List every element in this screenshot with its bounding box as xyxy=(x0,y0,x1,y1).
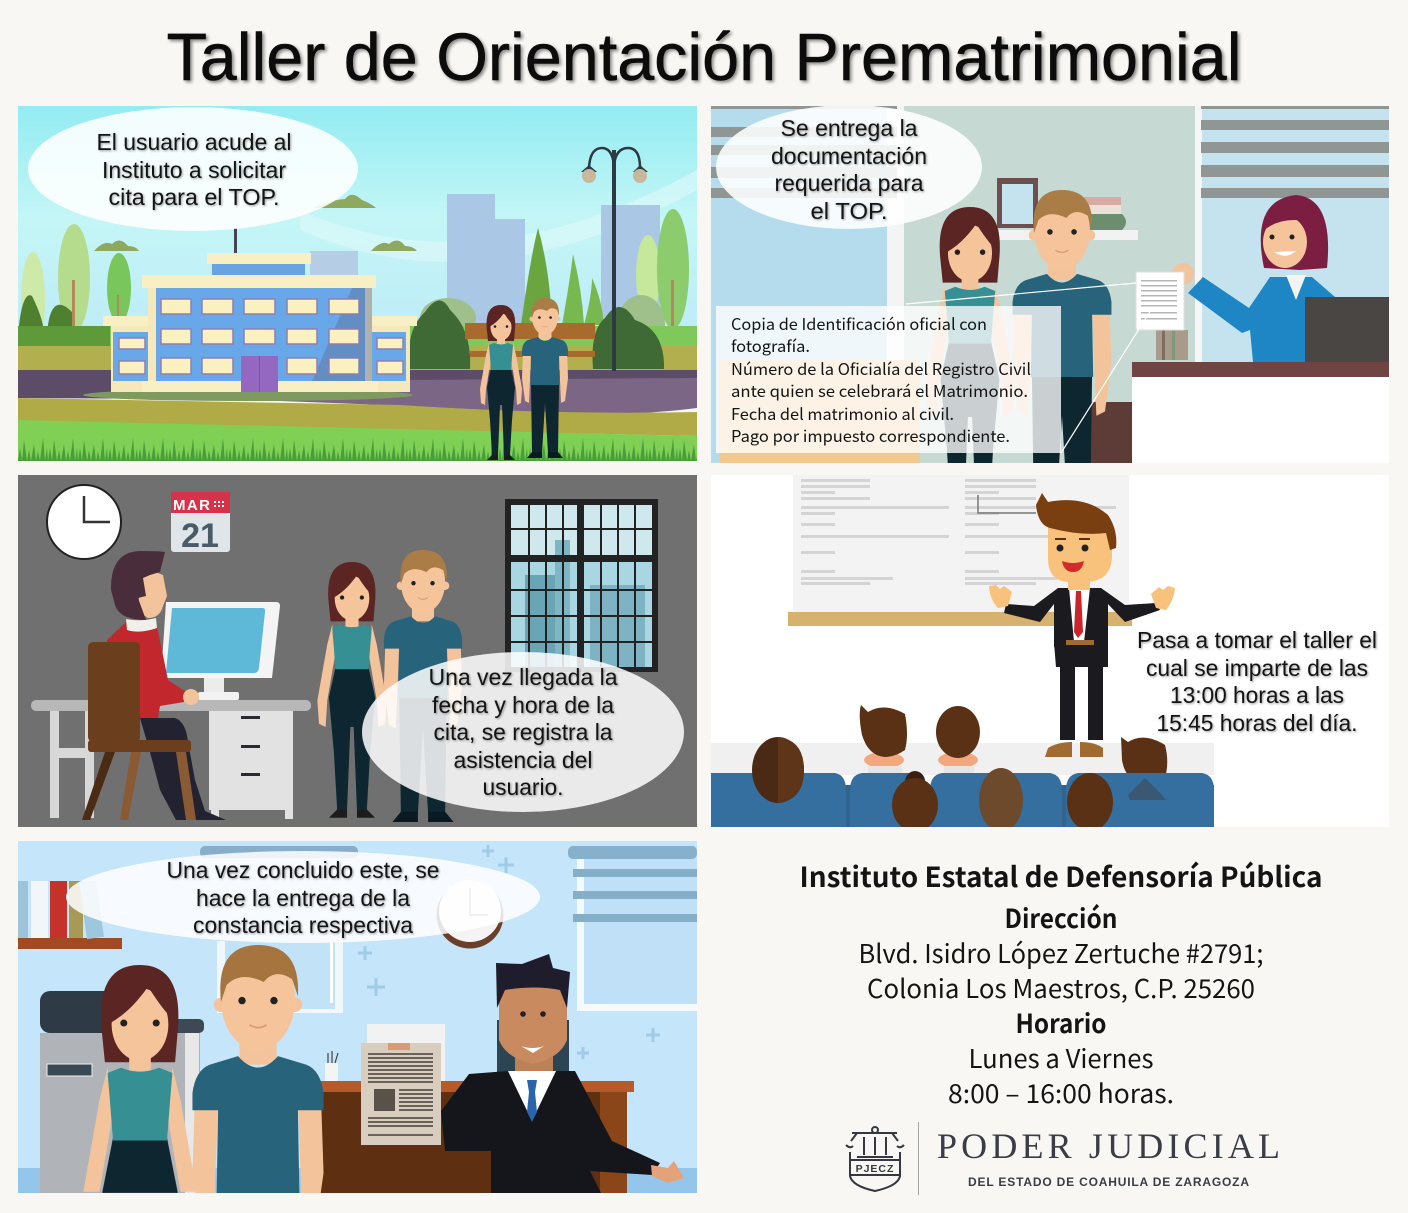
logo: Poder Judicial xyxy=(846,1122,1280,1195)
divider xyxy=(918,1122,919,1195)
presentation board xyxy=(788,475,1132,626)
audience seats xyxy=(711,773,1214,827)
workshop text: Pasa a tomar el taller el xyxy=(1137,627,1377,653)
bubble text: hace la entrega de la xyxy=(196,885,410,911)
book shelf xyxy=(18,880,122,949)
organisation name: PODER JUDICIAL xyxy=(937,1126,1280,1166)
gray room xyxy=(18,475,697,827)
workshop text: 13:00 horas a las xyxy=(1170,682,1344,708)
audience back row xyxy=(860,705,1167,785)
counter top xyxy=(1132,362,1389,377)
computer xyxy=(161,602,280,700)
state line: DEL ESTADO DE COAHUILA DE ZARAGOZA xyxy=(968,1175,1249,1189)
bubble text: constancia respectiva xyxy=(193,912,413,938)
center window xyxy=(217,941,343,1013)
institute name: Instituto Estatal de Defensoría Pública xyxy=(800,856,1322,896)
speech bubble xyxy=(28,107,358,231)
couple xyxy=(926,190,1112,463)
bubble text: asistencia del xyxy=(454,747,592,773)
crest icon: PJECZ xyxy=(856,1163,894,1175)
document xyxy=(1136,272,1184,330)
callout: requirements list: Número de la Oficialía del Registro Civil xyxy=(731,356,1031,380)
right trees and bushes xyxy=(420,209,689,326)
bushes and bench xyxy=(409,300,664,369)
address: Blvd. Isidro López Zertuche #2791; xyxy=(858,934,1264,971)
receptionist xyxy=(1172,195,1338,362)
pen cup xyxy=(325,1051,338,1081)
top blind center xyxy=(200,846,358,858)
speech bubble xyxy=(362,652,684,812)
presenter xyxy=(989,493,1175,757)
title: Taller de Orientación Prematrimonial xyxy=(166,20,1242,95)
newspaper document xyxy=(361,1043,441,1145)
bubble text: Una vez llegada la xyxy=(428,664,618,690)
office chair xyxy=(82,642,196,820)
monitor behind paper xyxy=(367,1024,445,1081)
address: Colonia Los Maestros, C.P. 25260 xyxy=(867,969,1255,1006)
sky swooshes xyxy=(300,170,697,262)
speech bubble xyxy=(716,105,982,229)
callout: requirements list: Pago por impuesto correspondiente. xyxy=(731,423,1010,447)
right window with blinds xyxy=(1195,106,1389,374)
bubble text: usuario. xyxy=(482,774,564,800)
workshop text: 15:45 horas del día. xyxy=(1156,710,1358,736)
plus decorations xyxy=(358,845,660,1059)
schedule: 8:00 – 16:00 horas. xyxy=(948,1074,1174,1111)
calendar: 21 xyxy=(181,517,219,555)
address: Dirección xyxy=(1004,899,1118,936)
floor strip xyxy=(18,1168,697,1193)
copier xyxy=(40,991,204,1193)
left window with blinds xyxy=(711,106,904,463)
bubble text: cita para el TOP. xyxy=(108,184,280,210)
speech bubble xyxy=(66,851,540,943)
city window xyxy=(505,499,658,672)
couple xyxy=(480,298,568,460)
white room xyxy=(711,475,1389,827)
bubble text: el TOP. xyxy=(810,198,888,224)
bubble text xyxy=(771,115,927,224)
workshop text: cual se imparte de las xyxy=(1146,655,1368,681)
sky xyxy=(18,106,697,326)
panel: user visits the institute xyxy=(18,106,697,461)
panel: certificate delivery xyxy=(18,841,697,1193)
shelf with frame and books xyxy=(997,178,1138,240)
panel: attendance registration xyxy=(18,475,697,827)
stage floor xyxy=(711,743,1214,775)
bubble text: Una vez concluido este, se xyxy=(166,857,440,883)
pencil cup xyxy=(1156,330,1188,360)
desk xyxy=(319,1081,634,1193)
official in suit xyxy=(441,954,684,1193)
callout: requirements list: fotografía. xyxy=(731,333,810,357)
clouds xyxy=(94,195,417,251)
desk with drawers xyxy=(31,700,311,819)
bubble text: Se entrega la xyxy=(780,115,918,141)
panel: workshop xyxy=(711,475,1389,832)
schedule xyxy=(948,1004,1174,1111)
seated employee xyxy=(107,551,226,820)
light blue office xyxy=(18,841,697,1193)
bubble text: Instituto a solicitar xyxy=(102,157,286,183)
panel: documentation delivery xyxy=(711,106,1389,463)
institute building xyxy=(83,228,417,401)
wall clock xyxy=(436,880,504,948)
counter and cabinet xyxy=(1090,377,1389,463)
callout: requirements list xyxy=(716,283,1151,453)
bubble text: requerida para xyxy=(774,170,924,196)
schedule: Lunes a Viernes xyxy=(968,1039,1154,1076)
workshop text xyxy=(1137,627,1377,736)
background city buildings xyxy=(310,194,660,325)
callout: requirements list: ante quien se celebrará el Matrimonio. xyxy=(731,378,1028,402)
wall clock xyxy=(47,485,121,559)
street lamp xyxy=(581,148,648,371)
callout: requirements list: Copia de Identificación oficial con xyxy=(731,311,987,335)
calendar xyxy=(171,492,230,555)
bubble text: fecha y hora de la xyxy=(432,692,614,718)
computer monitor xyxy=(1305,297,1389,362)
bubble text: El usuario acude al xyxy=(96,129,292,155)
sofa xyxy=(720,360,920,463)
schedule: Horario xyxy=(1016,1004,1106,1041)
couple xyxy=(83,945,324,1193)
bubble text: documentación xyxy=(771,143,927,169)
bubble text xyxy=(166,857,440,938)
contact information xyxy=(800,856,1322,1111)
bubble text: cita, se registra la xyxy=(434,719,613,745)
bubble text xyxy=(96,129,292,210)
couple xyxy=(317,550,462,822)
left trees xyxy=(18,224,131,326)
office wall xyxy=(904,106,1195,463)
crest icon xyxy=(846,1127,904,1191)
calendar: MAR xyxy=(173,497,210,514)
bubble text xyxy=(428,664,618,800)
grass blades xyxy=(18,436,697,461)
address xyxy=(858,899,1264,1006)
audience front row xyxy=(752,737,1113,832)
right window with blinds xyxy=(568,846,697,1011)
ground layers xyxy=(18,326,697,461)
callout: requirements list: Fecha del matrimonio al civil. xyxy=(731,401,954,425)
